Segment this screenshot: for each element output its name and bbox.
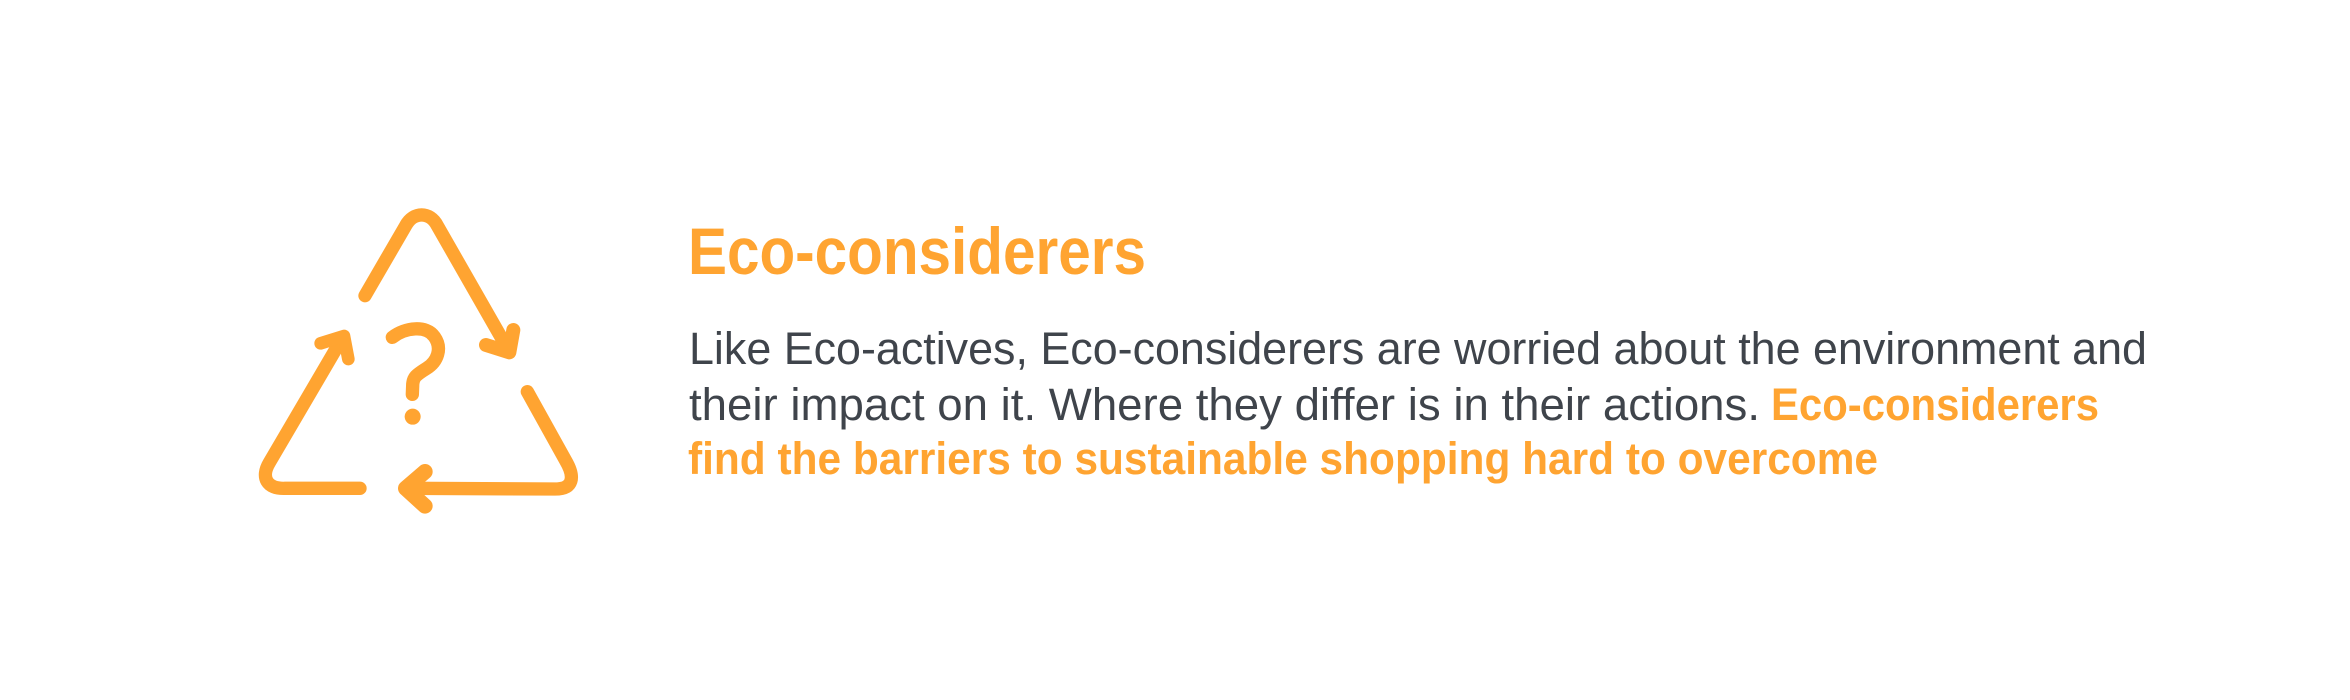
heading: Eco-considerers: Eco-considerers [688,214,1146,288]
arrow: bottom to left [265,336,360,488]
arrow: right to bottom [406,392,571,506]
arrow: top to right [365,215,513,352]
text block: description: Like Eco-actives, Eco-considerers are worried about the environment and [689,323,2147,374]
text block: description: their impact on it. Where they differ is in their actions. [689,379,1760,430]
text block: description [688,323,2147,484]
text block: description: find the barriers to sustainable shopping hard to overcome [688,433,1878,484]
icon: question mark [392,329,438,425]
icon: recycling triangle with question mark [265,215,571,506]
text block: description: Eco-considerers [1771,379,2099,430]
